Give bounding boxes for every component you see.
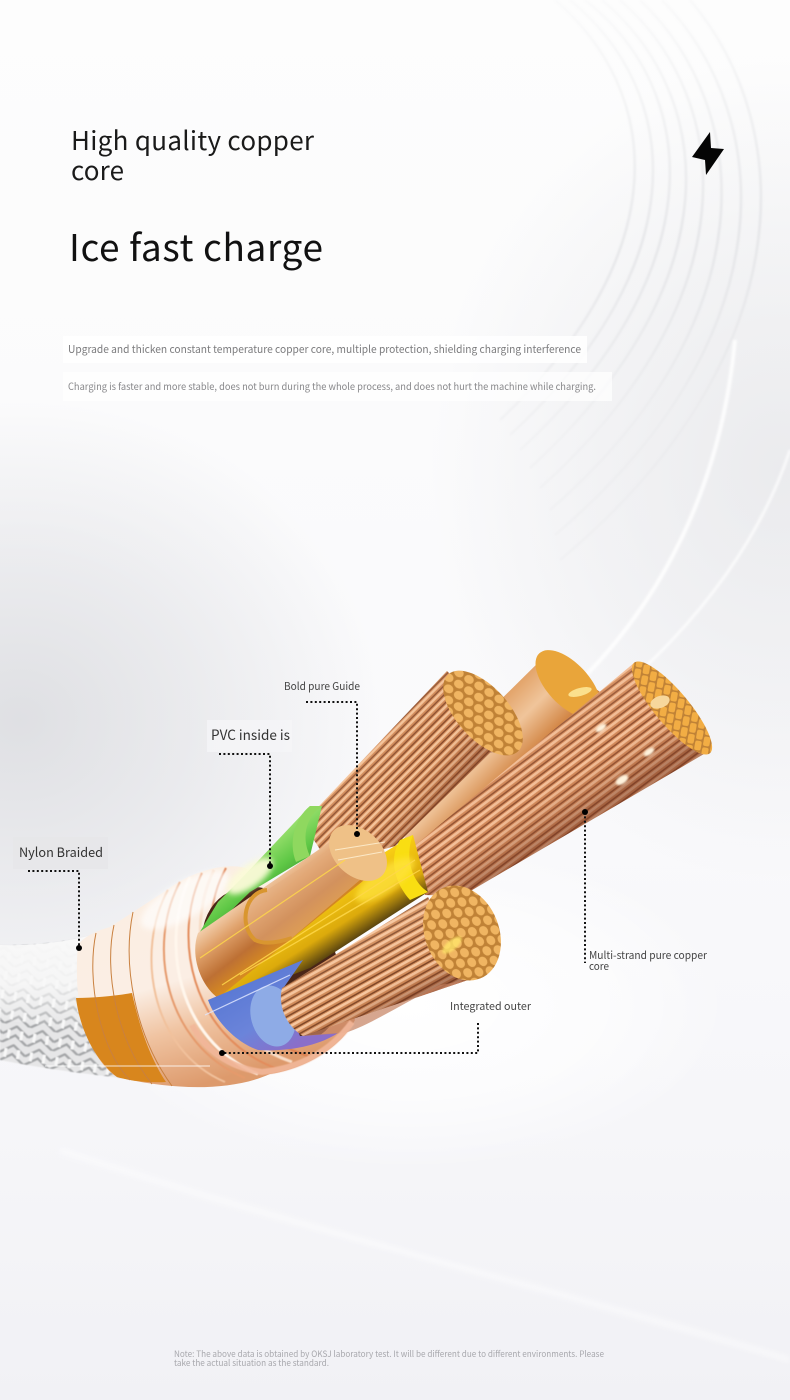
label: Integrated outer: Integrated outer <box>450 998 532 1014</box>
orange copper rod (rear) <box>400 639 612 845</box>
label: Multi-strand pure copper core: Multi-strand pure copper <box>589 948 708 963</box>
label: Bold pure Guide <box>284 679 360 837</box>
text block: description lines <box>63 336 612 401</box>
icon: lightning bolt <box>692 132 724 175</box>
heading: Ice fast charge: Ice fast charge <box>69 218 323 272</box>
copper rod with translucent cap <box>195 814 398 998</box>
copper bundle: top <box>303 657 537 865</box>
label: Nylon Braided: Nylon Braided <box>19 842 103 861</box>
connector collar <box>45 859 355 1087</box>
nylon braided sleeve <box>0 936 122 1078</box>
title: High quality copper core: core <box>71 151 124 188</box>
blue PVC sleeve <box>208 960 338 1052</box>
inner cavity <box>172 860 372 1070</box>
label: Bold pure Guide: Bold pure Guide <box>284 679 360 694</box>
copper bundle: multi-strand right <box>412 652 723 896</box>
label: Multi-strand pure copper core: core <box>589 959 609 974</box>
yellow PVC sleeve <box>200 835 428 1002</box>
text block: description lines: Charging is faster and more stable, does not burn during the whole process, and does not hurt the machine while charging. <box>68 379 596 393</box>
title: High quality copper core <box>71 121 315 188</box>
illustration: copper cable cross-section <box>0 639 723 1087</box>
text block: description lines: Upgrade and thicken constant temperature copper core, multiple protection, shielding charging interference <box>68 342 581 357</box>
footnote: take the actual situation as the standard. <box>174 1357 329 1369</box>
footnote <box>174 1348 604 1369</box>
label: Integrated outer <box>219 998 532 1056</box>
title: High quality copper core: High quality copper <box>71 121 315 158</box>
label: PVC inside is: PVC inside is <box>211 725 290 745</box>
label: Nylon Braided <box>13 837 108 951</box>
glow at collar lip <box>192 1022 352 1072</box>
energy streaks <box>200 860 420 1015</box>
footnote: Note: The above data is obtained by OKSJ laboratory test. It will be different due to different environments. Please <box>174 1348 604 1360</box>
copper bundle: lower front <box>281 874 515 1036</box>
label: PVC inside is <box>207 720 292 869</box>
label: Multi-strand pure copper core <box>582 809 708 974</box>
green PVC sleeve <box>198 806 322 935</box>
